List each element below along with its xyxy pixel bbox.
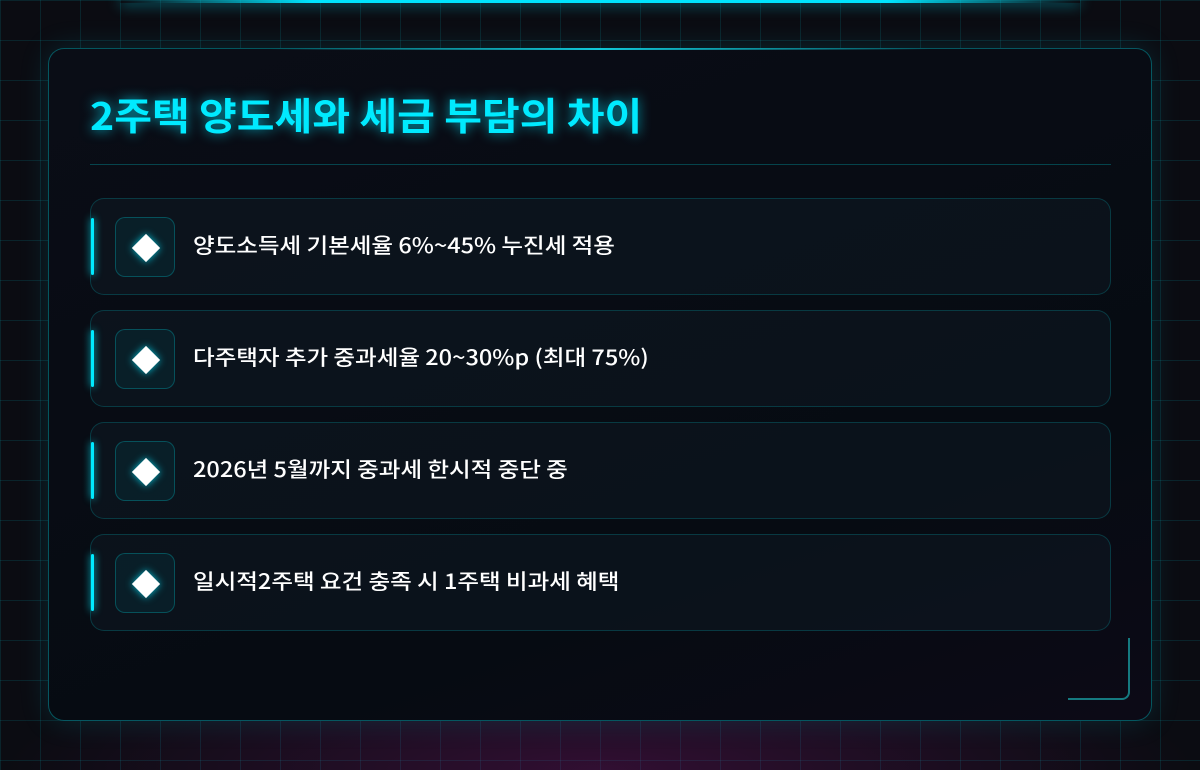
title: 2주택 양도세와 세금 부담의 차이 — [90, 86, 642, 141]
text: 2026년 5월까지 중과세 한시적 중단 중 — [193, 454, 568, 484]
item 3 — [90, 422, 1111, 519]
corner bracket — [1068, 638, 1130, 700]
icon: diamond — [115, 329, 175, 389]
icon: diamond — [115, 553, 175, 613]
text: 다주택자 추가 중과세율 20~30%p (최대 75%) — [193, 342, 649, 372]
text: 일시적2주택 요건 충족 시 1주택 비과세 혜택 — [193, 566, 619, 596]
text: 양도소득세 기본세율 6%~45% 누진세 적용 — [193, 230, 615, 260]
icon: diamond — [115, 217, 175, 277]
item 2 — [90, 310, 1111, 407]
item 1 — [90, 198, 1111, 295]
icon: diamond — [115, 441, 175, 501]
item 4 — [90, 534, 1111, 631]
